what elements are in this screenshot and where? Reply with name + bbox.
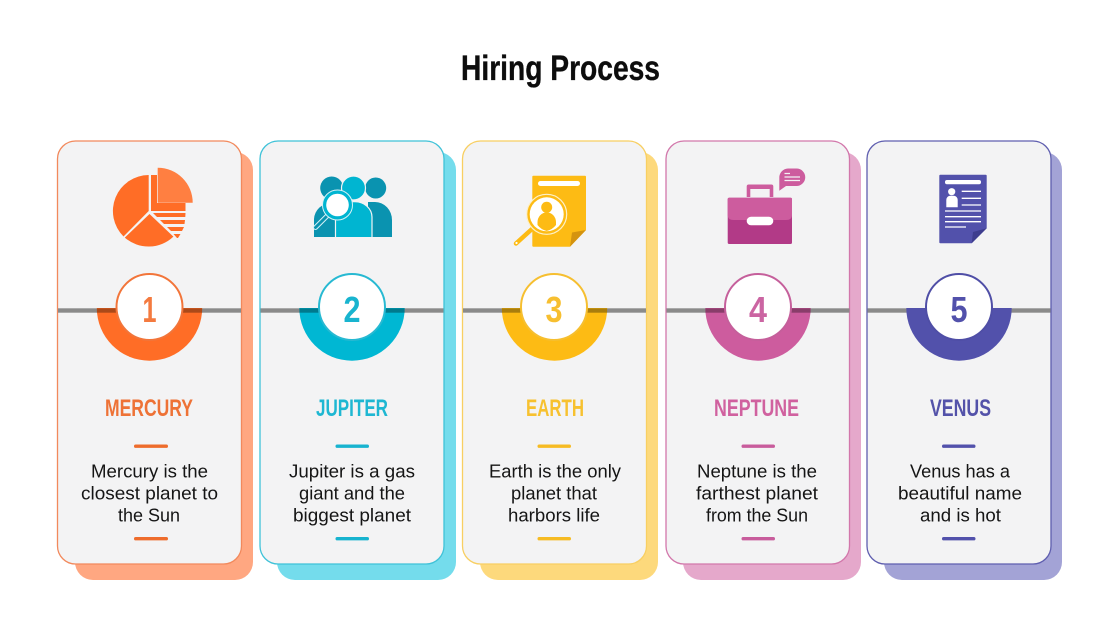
panel: Venus <box>867 141 1062 580</box>
dash <box>336 444 369 448</box>
icon: document with magnifier <box>515 176 586 247</box>
dash <box>742 537 775 540</box>
number badge: 3 <box>546 289 562 330</box>
number badge <box>116 274 182 340</box>
number badge <box>521 274 587 340</box>
half ring <box>705 308 811 361</box>
dash <box>538 537 571 540</box>
dash <box>942 537 976 540</box>
icon: briefcase with speech bubble <box>728 168 805 244</box>
panel: Jupiter <box>260 141 456 580</box>
icon: people with magnifier <box>314 176 392 238</box>
number badge <box>725 274 791 340</box>
text block <box>489 462 621 526</box>
card shadow <box>884 152 1062 580</box>
half ring <box>97 308 202 361</box>
heading: EARTH <box>526 395 584 422</box>
text block: harbors life <box>508 506 600 526</box>
text block: Venus has a <box>910 462 1011 482</box>
number badge <box>319 274 385 340</box>
timeline line <box>666 308 850 313</box>
card shadow <box>277 152 456 580</box>
text block: closest planet to <box>81 484 218 504</box>
heading: VENUS <box>930 395 991 422</box>
number badge <box>926 274 992 340</box>
text block: the Sun <box>118 506 180 526</box>
number badge: 4 <box>749 289 767 330</box>
number badge: 1 <box>142 289 156 330</box>
timeline line <box>868 308 1050 313</box>
dash <box>742 444 775 448</box>
number badge: 5 <box>950 289 968 330</box>
half ring <box>299 308 405 361</box>
text block: beautiful name <box>898 484 1022 504</box>
text block: Mercury is the <box>91 462 208 482</box>
title: Hiring Process <box>461 49 660 88</box>
card shadow <box>683 152 861 580</box>
card <box>462 141 646 564</box>
text block <box>289 462 415 526</box>
card shadow <box>480 152 658 580</box>
ring overlap band <box>299 308 405 313</box>
timeline line <box>58 308 241 313</box>
text block: from the Sun <box>706 506 808 526</box>
text block: Earth is the only <box>489 462 621 482</box>
ring overlap band <box>502 308 607 313</box>
dash <box>336 537 369 540</box>
heading: JUPITER <box>316 395 388 422</box>
icon: resume document <box>939 175 987 243</box>
number badge: 2 <box>344 289 360 330</box>
panel: Neptune <box>666 141 861 580</box>
heading: NEPTUNE <box>714 395 799 422</box>
card <box>867 141 1051 564</box>
dash <box>538 444 571 448</box>
dash <box>942 444 976 448</box>
text block: biggest planet <box>293 506 411 526</box>
text block: giant and the <box>299 484 405 504</box>
timeline line <box>463 308 646 313</box>
text block <box>696 462 818 526</box>
card <box>666 141 850 564</box>
panel: Mercury <box>58 141 253 580</box>
half ring <box>906 308 1012 361</box>
text block <box>898 462 1022 526</box>
timeline line <box>260 308 444 313</box>
text block: Neptune is the <box>697 462 817 482</box>
text block: planet that <box>511 484 597 504</box>
card shadow <box>75 152 253 580</box>
ring overlap band <box>705 308 811 313</box>
dash <box>134 444 168 448</box>
card <box>58 141 242 564</box>
icon: pie chart <box>113 168 193 247</box>
text block: farthest planet <box>696 484 818 504</box>
text block: Jupiter is a gas <box>289 462 415 482</box>
dash <box>134 537 168 540</box>
text block <box>81 462 218 526</box>
panel: Earth <box>462 141 658 580</box>
text block: and is hot <box>920 506 1001 526</box>
card <box>260 141 444 564</box>
heading: MERCURY <box>105 395 193 422</box>
half ring <box>502 308 607 361</box>
ring overlap band <box>97 308 202 313</box>
